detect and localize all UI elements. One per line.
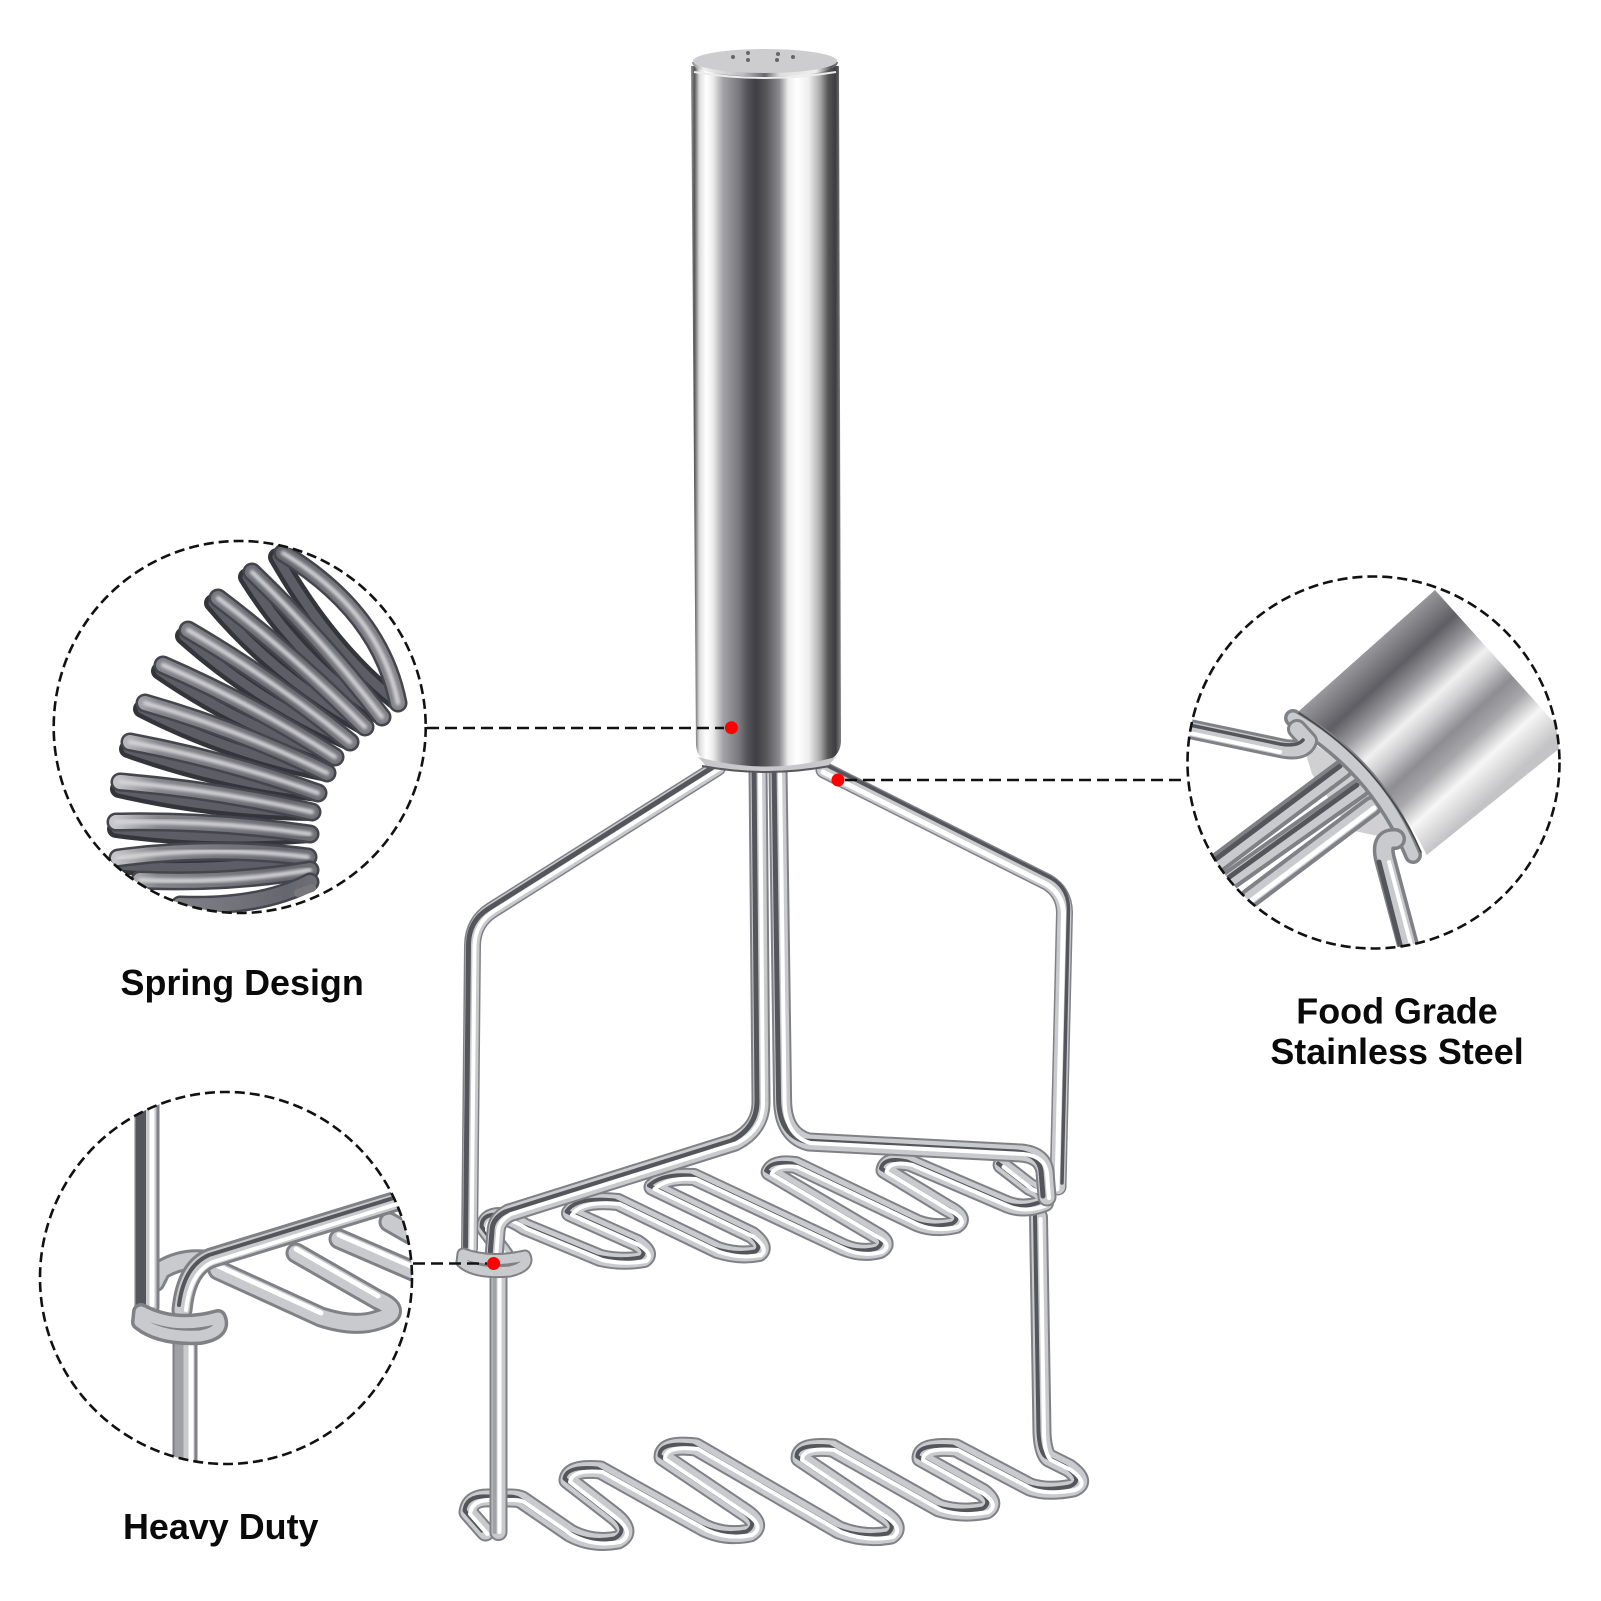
leader line [427, 727, 724, 729]
zoom image: wire joint [140, 1090, 420, 1470]
dashed circle [54, 541, 426, 913]
label: food grade stainless steel: Food Grade [1296, 992, 1498, 1032]
red marker [487, 1257, 500, 1270]
callout: spring design [54, 541, 738, 1003]
product: potato masher [462, 49, 1082, 1543]
hairpin strands [155, 1222, 420, 1323]
label: spring design: Spring Design [120, 963, 364, 1003]
handle body [691, 66, 841, 768]
cap holes [731, 51, 795, 62]
dashed circle [40, 1092, 412, 1464]
lower zigzag masher plate [464, 1216, 1082, 1543]
center stems close-up [1212, 766, 1374, 900]
cylinder rim [1293, 713, 1421, 855]
base face [1306, 746, 1390, 836]
handle base rim [698, 757, 836, 772]
left lower upright [494, 1277, 500, 1532]
handle cap rim [692, 62, 838, 77]
wire joint ring [462, 1254, 526, 1272]
handle [691, 49, 841, 772]
zoom image: handle base [1180, 590, 1570, 960]
upper zigzag masher plate [482, 1160, 1047, 1263]
lower wire [172, 1344, 198, 1461]
red marker [725, 721, 738, 734]
diagonal arm [182, 1200, 400, 1310]
right wire close-up [1379, 839, 1415, 960]
leader line [845, 779, 1187, 781]
leader line [413, 1262, 487, 1265]
handle cap [693, 49, 837, 73]
zoom image: spring coil [116, 553, 398, 905]
callout: heavy duty [40, 1090, 500, 1547]
upper left wire [134, 1090, 160, 1307]
cylinder [1297, 590, 1570, 855]
callout: food grade stainless steel [832, 576, 1570, 1072]
label: food grade stainless steel: Stainless Steel [1270, 1032, 1524, 1072]
left outer arm [466, 767, 720, 1249]
dashed circle [1188, 576, 1560, 948]
handle base shadow [702, 766, 830, 772]
label: heavy duty: Heavy Duty [123, 1507, 319, 1547]
right outer arm [823, 766, 1068, 1189]
center stems [490, 767, 1049, 1258]
left wire close-up [1180, 723, 1308, 752]
knot ring [140, 1312, 219, 1336]
red marker [832, 774, 844, 786]
cap rim highlight [694, 72, 836, 78]
